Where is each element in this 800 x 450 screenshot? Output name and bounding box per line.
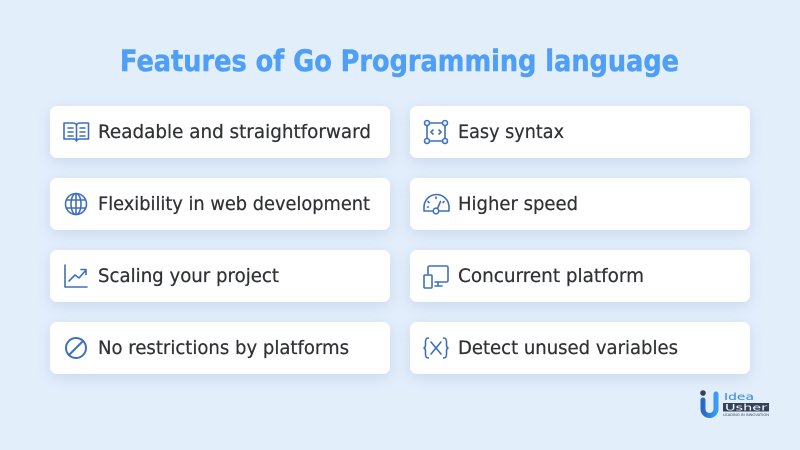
logo: Idea Usher xyxy=(700,390,770,417)
icon: line chart xyxy=(65,265,87,287)
logo word: Idea: Idea xyxy=(724,392,754,403)
title: Features of Go Programming language xyxy=(120,44,679,78)
label: Detect unused variables xyxy=(458,337,678,359)
panel: Detect unused variables xyxy=(410,322,750,374)
label: Concurrent platform xyxy=(458,265,644,287)
panel: Readable and straightforward xyxy=(50,106,390,158)
icon: variable braces xyxy=(424,338,448,358)
logo tagline: LEADING IN INNOVATION xyxy=(723,413,770,417)
panel: No restrictions by platforms xyxy=(50,322,390,374)
panel: Concurrent platform xyxy=(410,250,750,302)
icon: prohibited sign xyxy=(66,338,86,358)
panel: Easy syntax xyxy=(410,106,750,158)
panel: Higher speed xyxy=(410,178,750,230)
label: Easy syntax xyxy=(458,121,564,143)
label: Higher speed xyxy=(458,193,578,215)
icon: open book xyxy=(64,123,88,141)
label: Readable and straightforward xyxy=(98,121,371,143)
logo mark xyxy=(700,390,716,416)
panel: Scaling your project xyxy=(50,250,390,302)
icon: syntax frame xyxy=(424,120,448,144)
icon: globe xyxy=(66,194,86,214)
icon: speedometer xyxy=(424,194,449,214)
panel: Flexibility in web development xyxy=(50,178,390,230)
logo word: Usher: Usher xyxy=(725,404,767,414)
label: Scaling your project xyxy=(98,265,279,287)
label: Flexibility in web development xyxy=(98,193,370,215)
label: No restrictions by platforms xyxy=(98,337,349,359)
icon: monitor and phone xyxy=(424,266,448,288)
